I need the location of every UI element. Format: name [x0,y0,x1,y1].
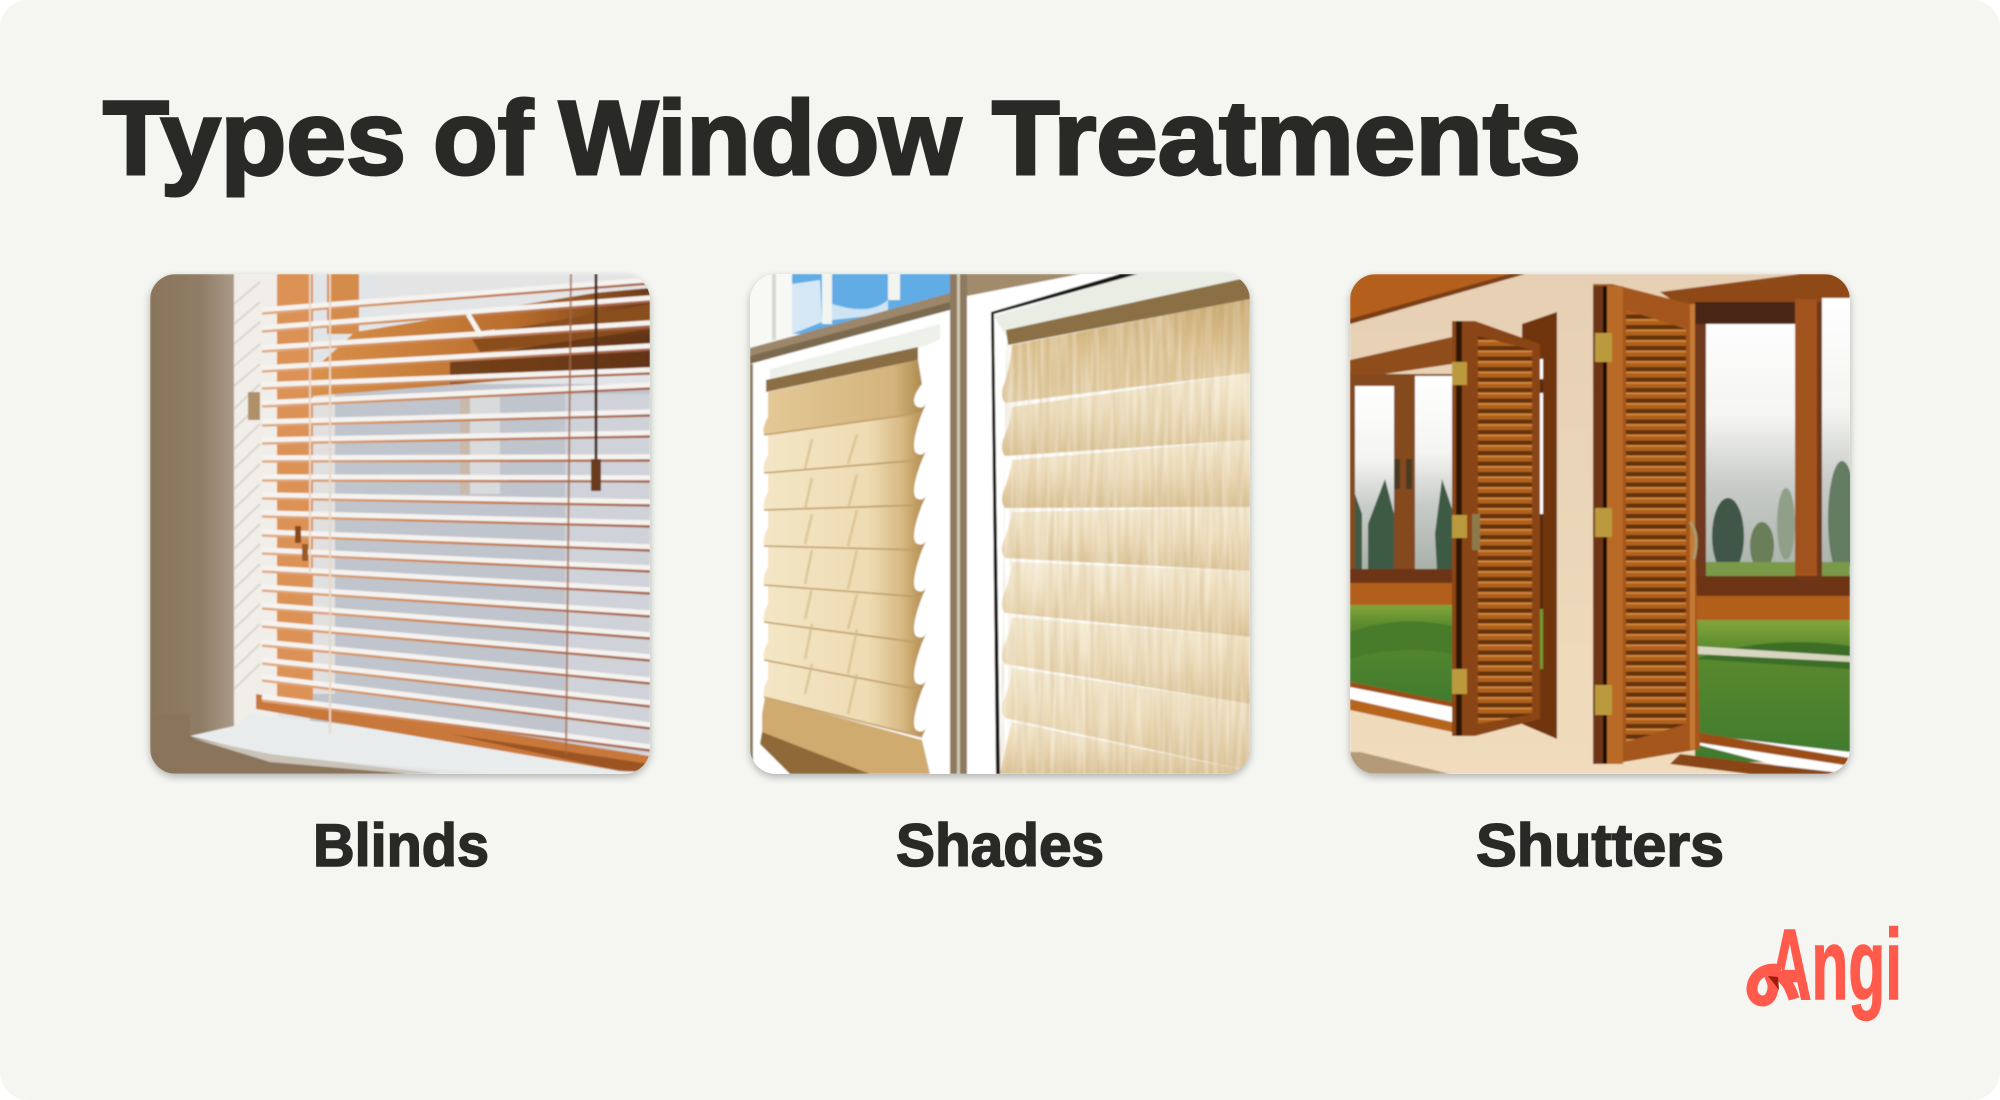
panel: shades photo [750,274,1250,774]
label: blinds: Blinds [313,812,489,879]
title: Treatments [992,80,1581,197]
ceiling [1350,274,1525,324]
right window [1660,274,1850,316]
left shutter panel [1452,321,1540,736]
cords [594,274,598,462]
wood head frame [313,284,650,396]
title: Window [559,80,961,197]
logo swash [1752,969,1794,1001]
carpet [1350,752,1450,774]
sill [190,714,650,774]
panel: blinds photo [150,274,650,774]
title: of [433,80,534,197]
sky [792,274,950,334]
title: Types [103,80,406,197]
right shade bands [1000,299,1250,774]
frame chevrons [234,282,260,689]
label: shades: Shades [896,812,1104,879]
title [102,80,1581,198]
sashes [750,293,950,364]
wood side frame [277,274,313,709]
left shade bands [764,360,926,737]
left shutter frame [1522,312,1557,739]
bottom rail [256,694,650,772]
slats [262,280,650,747]
panel: shutters photo [1350,274,1850,774]
label: shutters: Shutters [1476,812,1724,879]
window view [310,384,650,754]
left window [1350,337,1452,379]
right shutter frame [1593,284,1700,764]
